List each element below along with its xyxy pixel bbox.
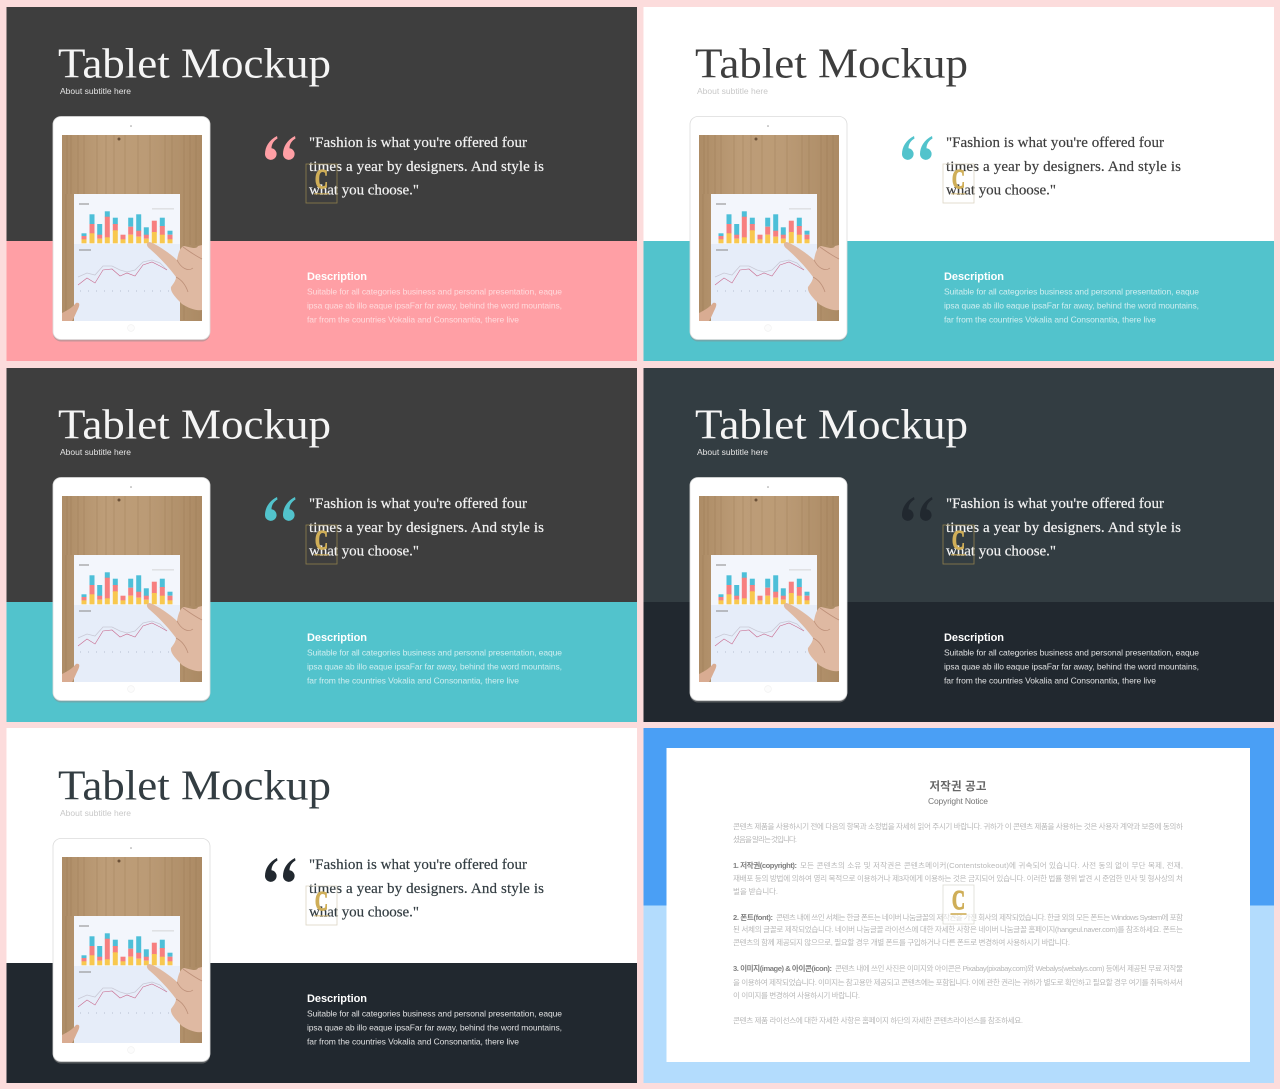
description body: ipsa quae ab illo eaque ipsaFar far away, behind the word mountains, [307,300,562,310]
colour band [644,602,1274,722]
quote text: times a year by designers. And style is [309,881,544,897]
watermark logo: C [315,164,328,194]
quote text: "Fashion is what you're offered four [946,135,1164,151]
closing line: 콘텐츠 제품 라이선스에 대한 자세한 사항은 홈페이지 하단의 자세한 콘텐츠라이선스를 참조하세요. [733,1015,1023,1025]
quote text: what you choose." [309,182,419,198]
quote text: times a year by designers. And style is [946,159,1181,175]
quote text: times a year by designers. And style is [946,520,1181,536]
section 3: image and icon: 을 이용하여 제작되었습니다. 이미지는 참고용만 제공되고 콘텐츠에는 포함됩니다. 이에 관한 권리는 귀하가 별도로 확인하고 필요할 경우 여기를 취득하셔서 [733,977,1183,987]
description heading: Description [307,271,367,283]
panel: slate slide with navy band [644,368,1274,722]
description body: ipsa quae ab illo eaque ipsaFar far away, behind the word mountains, [944,662,1199,672]
tablet mockup [53,838,210,1064]
blue upper background [644,728,1274,906]
description body: far from the countries Vokalia and Consonantia, there live [944,676,1156,686]
panel: dark slide with pink band [6,7,637,361]
description body: Suitable for all categories business and personal presentation, eaque [307,648,562,658]
section 1: copyright: 모든 콘텐츠의 소유 및 저작권은 콘텐츠메이커(Contentstokeout)에 귀속되어 있습니다. 사전 동의 없이 무단 복제, 전재, [800,860,1183,870]
subtitle: About subtitle here [60,86,131,96]
icon: quotation mark [265,858,296,882]
tablet mockup [53,116,210,342]
quote text: "Fashion is what you're offered four [946,496,1164,512]
section 2: font: 2. 폰트(font): [733,913,773,922]
subtitle: About subtitle here [60,447,131,457]
colour band [6,602,637,722]
icon: quotation mark [902,497,932,521]
panel: white slide with navy band [6,728,637,1083]
description body: far from the countries Vokalia and Consonantia, there live [307,1036,519,1046]
slide background [644,7,1274,361]
description body: Suitable for all categories business and personal presentation, eaque [307,286,562,296]
description body: Suitable for all categories business and personal presentation, eaque [307,1008,562,1018]
section 1: copyright: 1. 저작권(copyright): [733,860,797,870]
title: Tablet Mockup [695,42,968,88]
quote text: "Fashion is what you're offered four [309,135,527,151]
quote text: what you choose." [309,544,419,560]
description body: ipsa quae ab illo eaque ipsaFar far away, behind the word mountains, [944,300,1199,310]
section 2: font: 된 서체의 글꼴로 제작되었습니다. 네이버 나눔글꼴 라이선스에 대한 자세한 사항은 네이버 나눔글꼴 홈페이지(hangeul.naver.com)를 참조하세요. 폰트는 [733,924,1183,934]
icon: quotation mark [902,136,932,160]
quote text: "Fashion is what you're offered four [309,496,527,512]
section 1: copyright: 재배포 등의 방법에 의하여 영리 목적으로 이용하거나 제3자에게 이용하는 것은 금지되어 있습니다. 이러한 법률 행위 발견 시 준엄한 민사 및 형사상의 처 [733,873,1183,883]
slide background [644,368,1274,722]
quote text: what you choose." [946,544,1056,560]
description heading: Description [307,632,367,644]
watermark logo: C [315,886,328,916]
slide background [6,728,637,1083]
icon: quotation mark [265,497,296,521]
watermark logo: C [952,525,965,555]
quote text: what you choose." [946,182,1056,198]
description heading: Description [944,632,1004,644]
watermark logo [306,164,337,203]
slide background [6,368,637,722]
title: Tablet Mockup [58,42,331,88]
slide background [6,7,637,361]
description heading: Description [944,271,1004,283]
quote text: "Fashion is what you're offered four [309,857,527,873]
subtitle: About subtitle here [697,86,768,96]
colour band [6,963,637,1083]
panel: dark slide with teal band [6,368,637,722]
panel: copyright notice [644,728,1274,1083]
watermark logo [943,525,974,564]
icon: quotation mark [265,136,296,160]
heading: English: Copyright Notice [928,796,988,806]
watermark logo [943,164,974,203]
section 3: image and icon: 3. 이미지(image) & 아이콘(icon): [733,963,832,973]
watermark logo: C [315,525,328,555]
section 3: image and icon: 콘텐츠 내에 쓰인 사진은 이미지와 아이콘은 Pixabay(pixabay.com)와 Webalys(webalys.com) 등에서 제공된 무료 저작물 [835,963,1183,973]
tablet mockup [690,478,847,702]
title: Tablet Mockup [695,402,968,448]
white card [666,748,1250,1062]
heading: Korean: 저작권 공고 [930,779,987,793]
intro paragraph: 콘텐츠 제품을 사용하시기 전에 다음의 항목과 소정법을 자세히 읽어 주시기 바랍니다. 귀하가 이 콘텐츠 제품을 사용하는 것은 사용자 계약과 보증에 동의하 [733,821,1183,831]
subtitle: About subtitle here [697,447,768,457]
title: Tablet Mockup [58,402,331,448]
quote text: what you choose." [309,904,419,920]
description body: Suitable for all categories business and personal presentation, eaque [944,648,1199,658]
quote text: times a year by designers. And style is [309,520,544,536]
description body: ipsa quae ab illo eaque ipsaFar far away, behind the word mountains, [307,1022,562,1032]
watermark logo [306,525,337,564]
panel: white slide with teal band [644,7,1274,361]
tablet mockup [53,478,210,702]
watermark logo [943,885,974,924]
section 2: font: 콘텐츠 내에 쓰인 서체는 한글 폰트는 네이버 나눔글꼴의 저작권을 가진 회사의 제작되었습니다. 한글 외의 모든 폰트는 Windows System에 포함 [776,912,1183,922]
description body: ipsa quae ab illo eaque ipsaFar far away, behind the word mountains, [307,662,562,672]
tablet mockup [690,116,847,342]
description body: Suitable for all categories business and personal presentation, eaque [944,286,1199,296]
section 2: font: 콘텐츠의 함께 제공되지 않으므로, 필요할 경우 개별 폰트를 구입하거나 다른 폰트로 변경하여 사용하시기 바랍니다. [733,937,1070,947]
subtitle: About subtitle here [60,808,131,818]
title: Tablet Mockup [58,764,331,810]
quote text: times a year by designers. And style is [309,159,544,175]
watermark logo: C [952,164,965,194]
description body: far from the countries Vokalia and Consonantia, there live [307,676,519,686]
description body: far from the countries Vokalia and Consonantia, there live [307,314,519,324]
description body: far from the countries Vokalia and Consonantia, there live [944,314,1156,324]
intro paragraph: 셨음을 알리는 것입니다. [733,834,797,844]
watermark logo: C [952,885,965,915]
colour band [644,241,1274,361]
watermark logo [306,886,337,925]
description heading: Description [307,993,367,1005]
section 3: image and icon: 이 이미지를 변경하여 사용하시기 바랍니다. [733,990,860,1000]
colour band [6,241,637,361]
light blue lower background [644,906,1274,1083]
section 1: copyright: 벌을 받습니다. [733,886,778,896]
